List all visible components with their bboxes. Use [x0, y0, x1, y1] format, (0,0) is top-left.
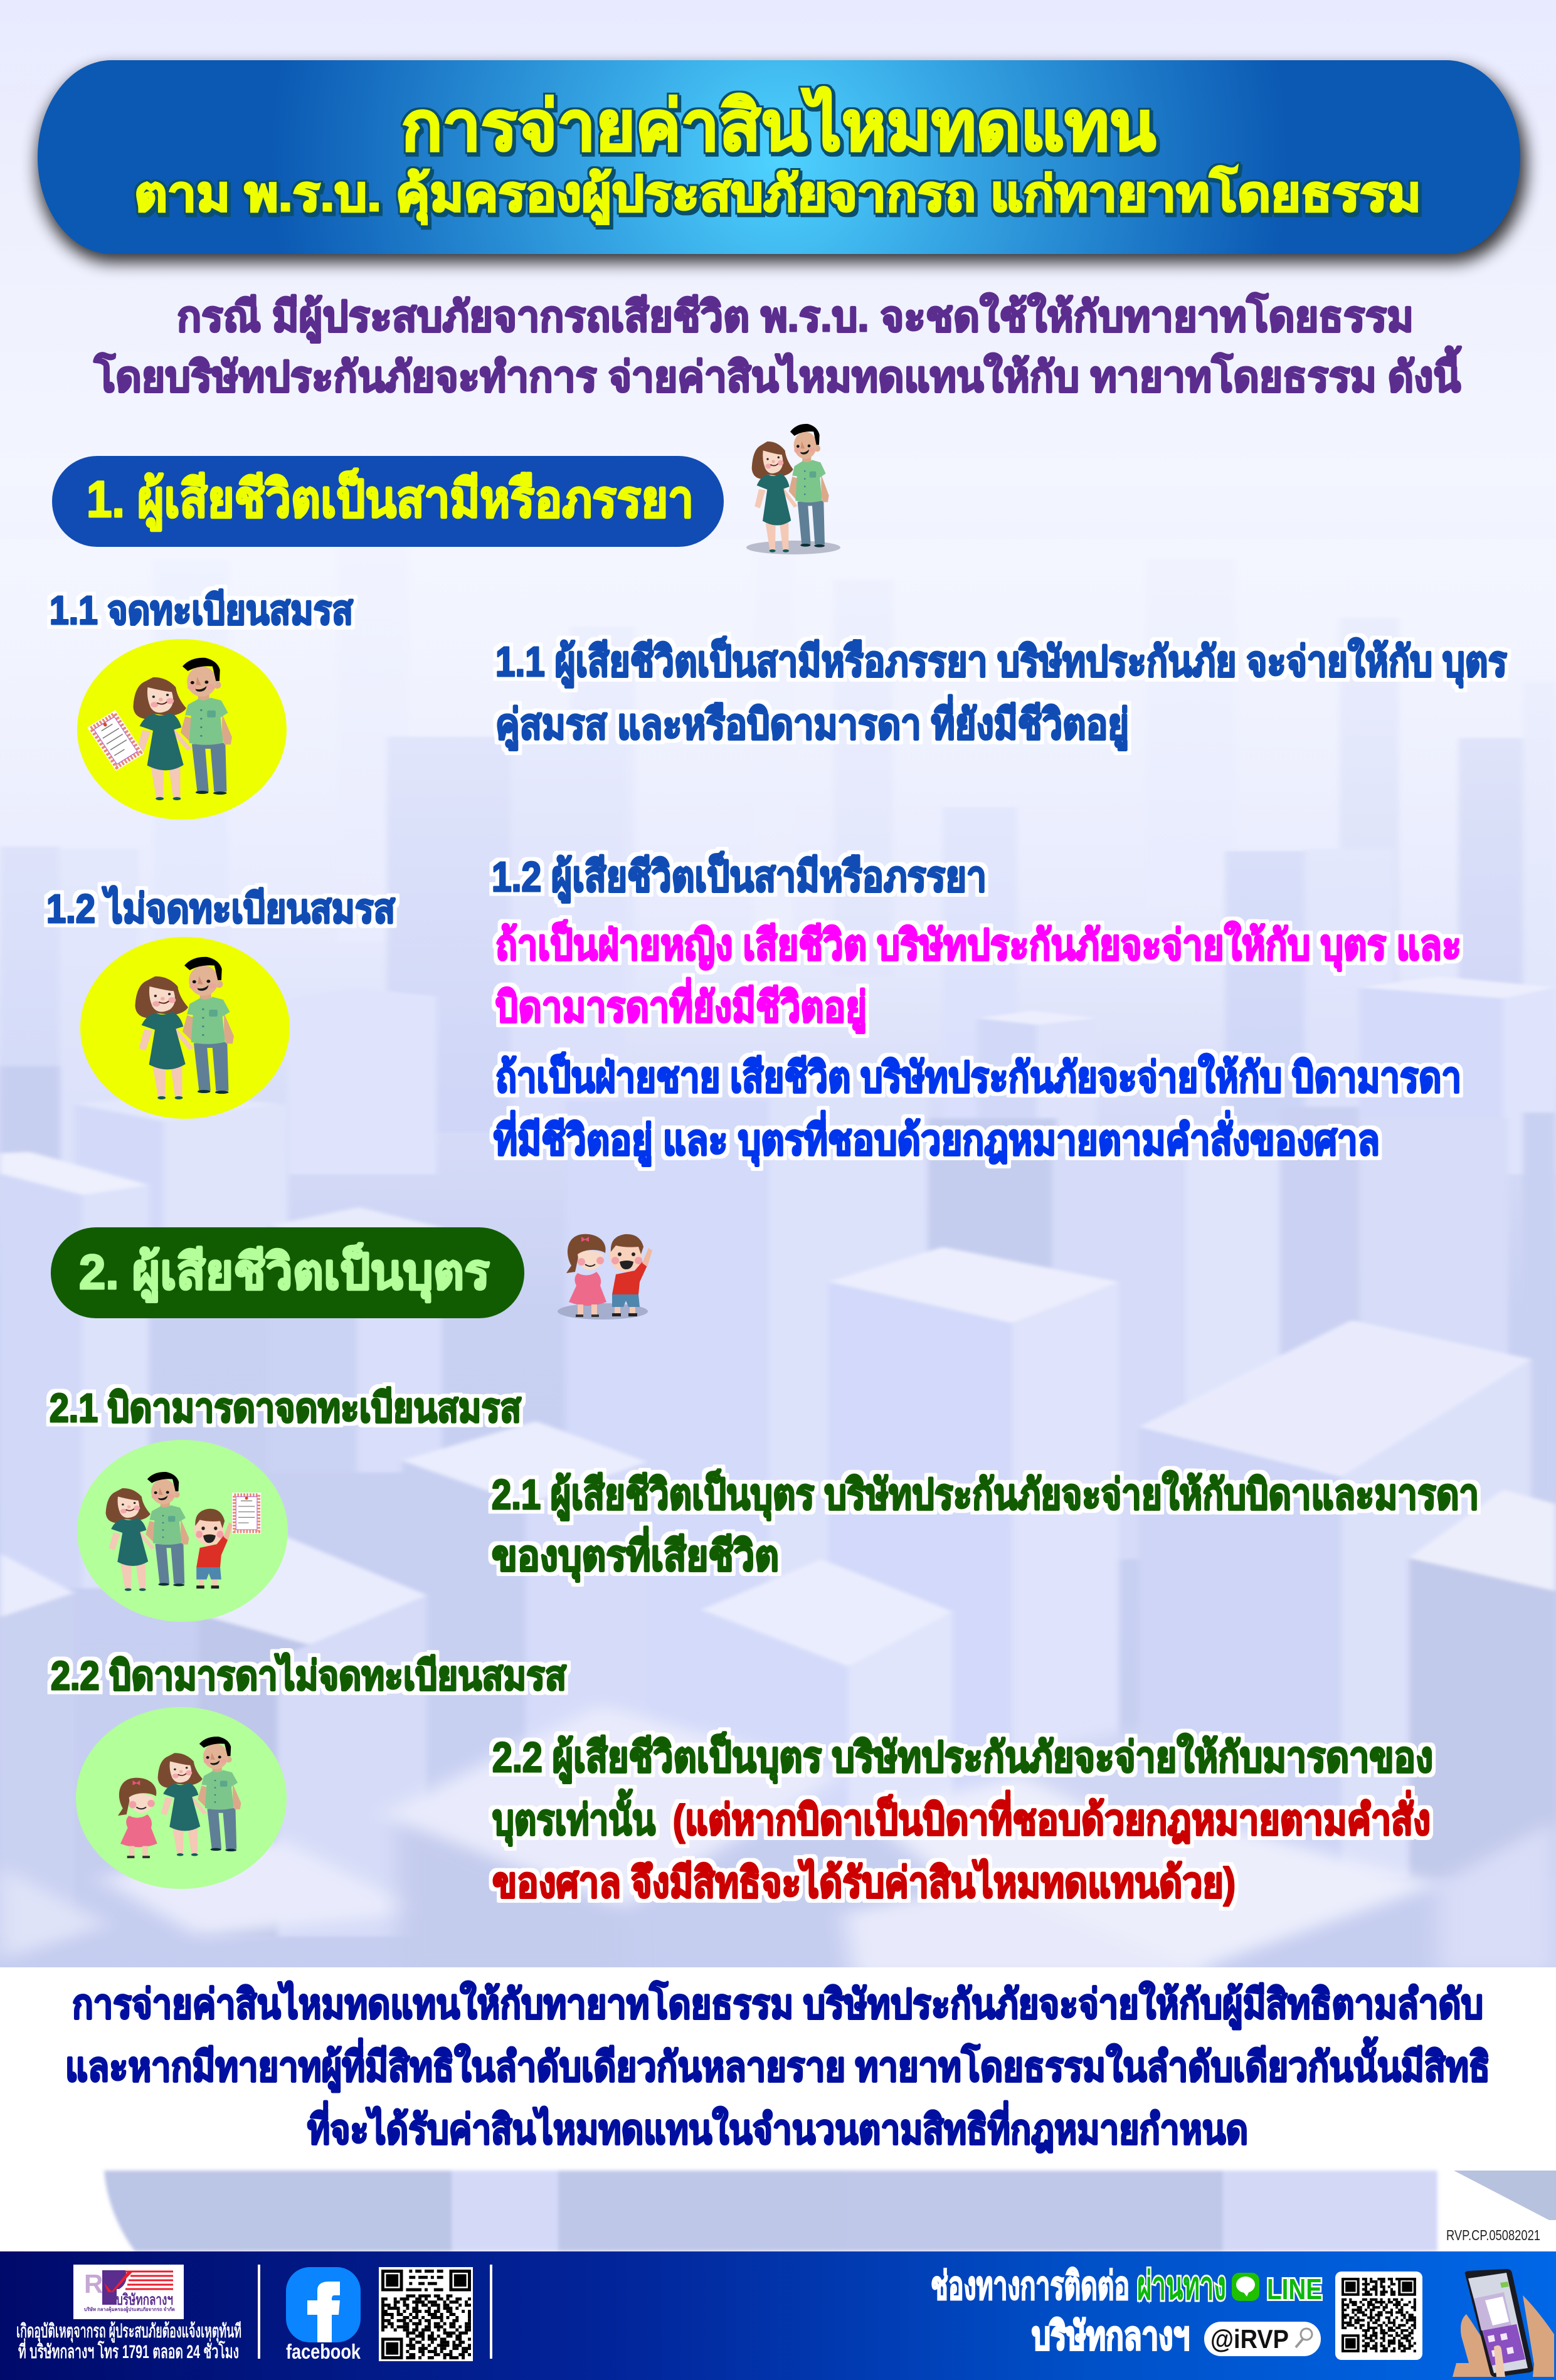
accident reporting note: เกิดอุบัติเหตุจากรถ ผู้ประสบภัยต้องแจ้งเหตุทันที — [16, 2321, 241, 2343]
illustration 1.2: couple — [80, 937, 290, 1119]
title line 2: ตาม พ.ร.บ. คุ้มครองผู้ประสบภัยจากรถ แก่ทายาทโดยธรรม — [134, 165, 1421, 225]
intro text — [93, 292, 1462, 401]
text 2.2: ของศาล จึงมีสิทธิจะได้รับค่าสินไหมทดแทนด้วย) — [492, 1858, 1236, 1907]
footer bar — [0, 2251, 1556, 2380]
company logo: บริษัทกลางฯ — [116, 2292, 173, 2309]
QR code: facebook — [379, 2267, 473, 2361]
text 2.1: ของบุตรที่เสียชีวิต — [492, 1526, 779, 1582]
company logo — [73, 2265, 184, 2319]
LINE contact heading: LINE — [1267, 2273, 1322, 2305]
title line 1: การจ่ายค่าสินไหมทดแทน — [401, 87, 1156, 165]
company logo: บริษัท กลางคุ้มครองผู้ประสบภัยจากรถ จำกัด — [84, 2306, 175, 2313]
intro text: โดยบริษัทประกันภัยจะทำการ จ่ายค่าสินไหมทดแทนให้กับ ทายาทโดยธรรม ดังนี้ — [93, 346, 1462, 401]
text 2.2: บุตรเท่านั้น — [492, 1789, 655, 1846]
icon: two children with shadow — [558, 1234, 652, 1320]
LINE contact heading: ผ่านทาง — [1137, 2265, 1226, 2308]
icon: facebook — [286, 2267, 361, 2363]
LINE ID pill — [1204, 2322, 1321, 2356]
intro text: กรณี มีผู้ประสบภัยจากรถเสียชีวิต พ.ร.บ. จะชดใช้ให้กับทายาทโดยธรรม — [177, 292, 1414, 343]
text 2.1 — [492, 1469, 1479, 1582]
summary band: ที่จะได้รับค่าสินไหมทดแทนในจำนวนตามสิทธิที่กฎหมายกำหนด — [307, 2101, 1248, 2152]
section 2 pill: 2. ผู้เสียชีวิตเป็นบุตร — [79, 1243, 490, 1303]
icon: LINE — [1232, 2273, 1259, 2301]
company logo: R — [84, 2269, 103, 2298]
accident reporting note: ที่ บริษัทกลางฯ โทร 1791 ตลอด 24 ชั่วโมง — [18, 2338, 239, 2362]
text 2.2 — [492, 1732, 1433, 1907]
section 1 pill: 1. ผู้เสียชีวิตเป็นสามีหรือภรรยา — [87, 468, 694, 531]
summary band — [0, 1967, 1556, 2171]
icon: facebook: facebook — [286, 2340, 361, 2363]
illustration 2.1: family with certificate — [77, 1440, 288, 1622]
text 1.2: 1.2 ผู้เสียชีวิตเป็นสามีหรือภรรยา — [492, 851, 987, 903]
illustration 2.2: family with daughter — [76, 1707, 287, 1889]
accident reporting note — [16, 2321, 241, 2362]
text 1.2: ที่มีชีวิตอยู่ และ บุตรที่ชอบด้วยกฎหมายตามคำสั่งของศาล — [494, 1110, 1380, 1166]
icon: couple with shadow — [746, 424, 840, 554]
subheading 2.2: 2.2 บิดามารดาไม่จดทะเบียนสมรส — [51, 1653, 566, 1698]
icon: hand holding phone — [1453, 2269, 1554, 2377]
subheading 2.1: 2.1 บิดามารดาจดทะเบียนสมรส — [50, 1385, 521, 1431]
title panel — [38, 60, 1527, 263]
LINE ID pill: @iRVP — [1210, 2324, 1289, 2354]
lower building strip — [0, 2171, 1556, 2252]
text 1.2: บิดามารดาที่ยังมีชีวิตอยู่ — [495, 977, 867, 1034]
subheading 1.2: 1.2 ไม่จดทะเบียนสมรส — [46, 886, 395, 931]
section 1 pill — [52, 456, 724, 547]
text 2.2: (แต่หากบิดาเป็นบิดาที่ชอบด้วยกฎหมายตามคำสั่ง — [673, 1790, 1431, 1844]
QR code: LINE — [1335, 2272, 1422, 2360]
text 1.1: คู่สมรส และหรือบิดามารดา ที่ยังมีชีวิตอยู่ — [495, 694, 1129, 751]
company name: บริษัทกลางฯ — [1032, 2315, 1190, 2358]
text 1.2 — [492, 851, 1461, 1166]
illustration 1.1: couple with certificate — [77, 639, 287, 820]
LINE contact heading: ช่องทางการติดต่อ — [931, 2265, 1130, 2308]
subheading 1.1: 1.1 จดทะเบียนสมรส — [50, 588, 353, 633]
text 1.1 — [495, 636, 1507, 751]
section 2 pill — [51, 1227, 524, 1318]
